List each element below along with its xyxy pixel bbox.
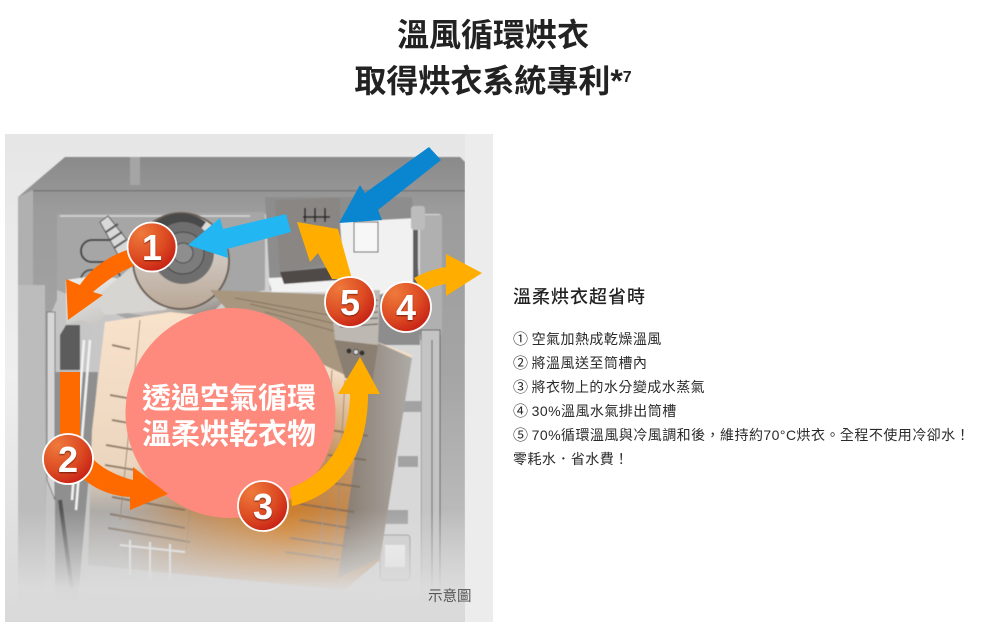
step list: ③ (513, 376, 528, 397)
badge 4 (381, 282, 431, 332)
title: 溫風循環烘衣 (397, 17, 589, 53)
arrow: amber exhaust air (414, 254, 482, 296)
badge 5 (325, 277, 375, 327)
title: 取得烘衣系統專利*7 (354, 63, 632, 99)
arrow: amber recirculated air (297, 222, 352, 279)
arrow: dark blue cool air intake (339, 147, 441, 223)
arrow: amber steam out of drum (290, 357, 380, 506)
step list: 70%循環溫風與冷風調和後，維持約70°C烘衣。全程不使用冷卻水！ (532, 427, 970, 443)
arrow: cyan air into fan (188, 214, 291, 258)
subheading: 溫柔烘衣超省時 (513, 287, 646, 307)
badge 1: 1 (142, 227, 162, 268)
step list: ② (513, 352, 528, 373)
step list: 零耗水．省水費！ (513, 451, 629, 467)
badge 5: 5 (340, 282, 360, 323)
badge 2: 2 (58, 439, 78, 480)
badge 2 (43, 434, 93, 484)
salmon circle with caption (126, 308, 336, 518)
badge 4: 4 (396, 287, 416, 328)
diagram: warm air circulation in the dryer (5, 134, 493, 622)
step list: 將溫風送至筒槽內 (532, 355, 647, 371)
arrow: orange hot air into drum (60, 372, 168, 510)
right side rail (420, 215, 442, 335)
step list: ⑤ (513, 424, 528, 445)
step list: 空氣加熱成乾燥溫風 (532, 331, 662, 347)
panel: appliance cutaway illustration (5, 134, 493, 622)
step list (513, 328, 970, 467)
salmon circle with caption: 溫柔烘乾衣物 (142, 418, 316, 451)
drum (88, 312, 412, 590)
arrow: orange from heater to duct (66, 250, 134, 320)
step list: 30%溫風水氣排出筒槽 (532, 403, 677, 419)
salmon circle with caption: 透過空氣循環 (142, 382, 316, 415)
illustration note: 示意圖 (428, 587, 472, 605)
step list: ① (513, 328, 528, 349)
badge 1 (128, 222, 176, 272)
badge 3: 3 (253, 486, 273, 527)
step list: ④ (513, 400, 528, 421)
title (354, 17, 632, 99)
step list: 將衣物上的水分變成水蒸氣 (532, 379, 705, 395)
top box (265, 197, 420, 345)
badge 3 (238, 481, 288, 531)
duct and fan (66, 275, 225, 325)
